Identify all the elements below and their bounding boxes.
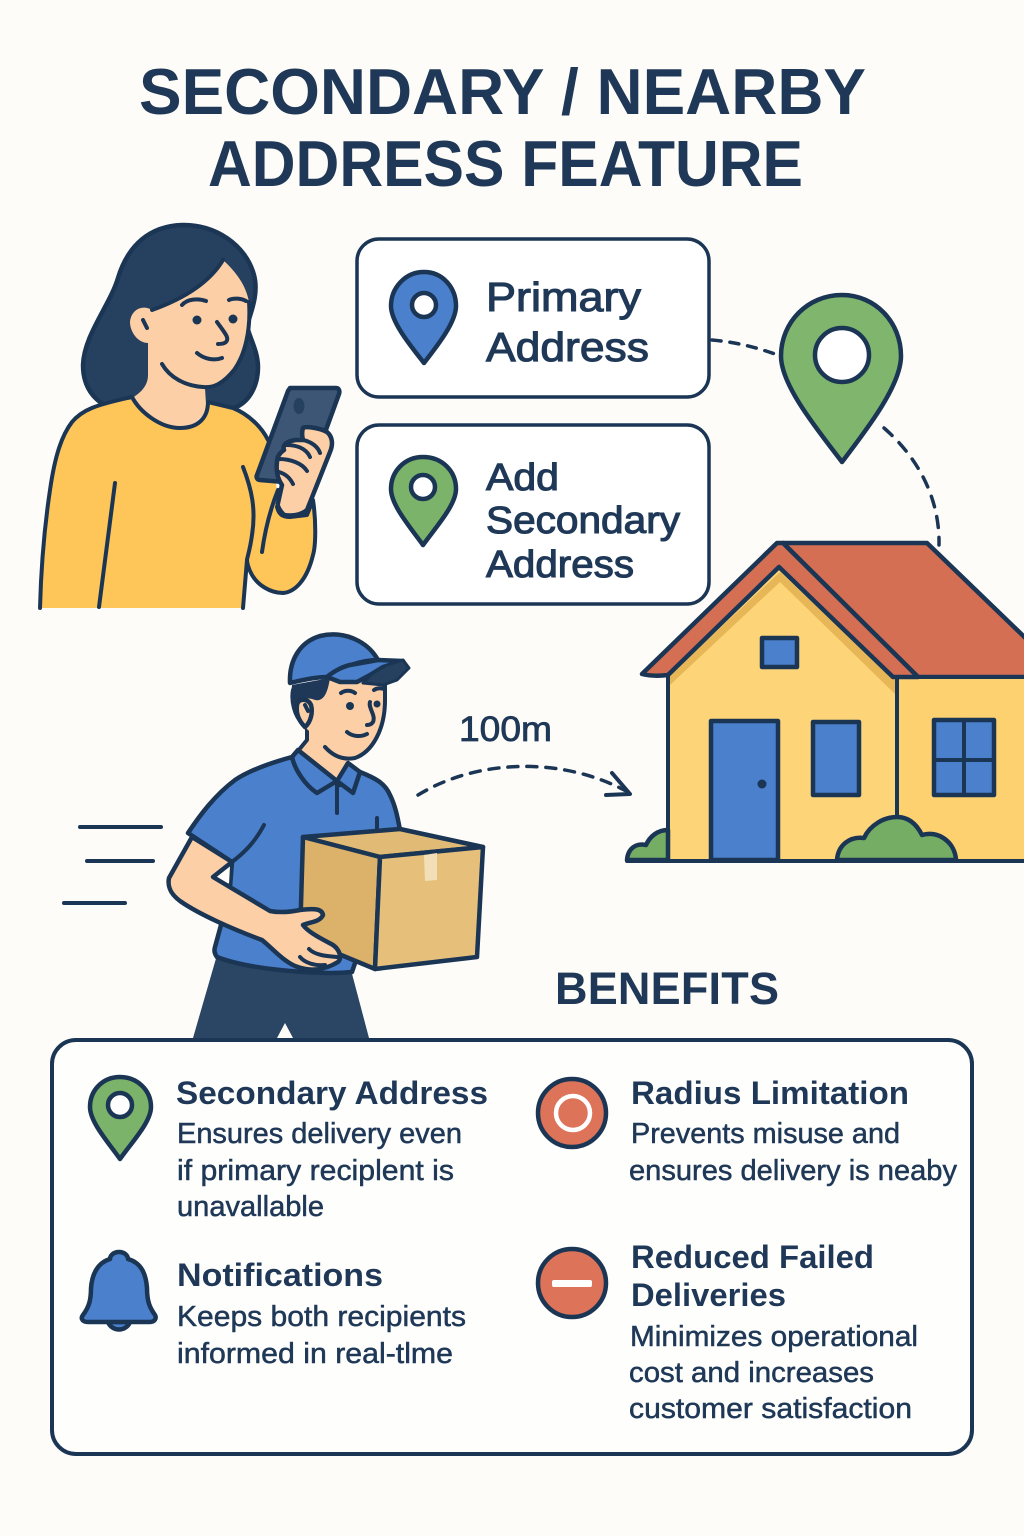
finger lines [300, 949, 337, 965]
card: add secondary address [357, 425, 709, 604]
icon: green pin [90, 1077, 151, 1159]
face details [143, 260, 249, 387]
hand [277, 427, 332, 515]
cap dome [290, 634, 378, 683]
window [813, 722, 859, 795]
icon: red circle with ring [538, 1079, 606, 1147]
fingers [279, 440, 320, 484]
ear and face details [297, 688, 384, 736]
phone [257, 388, 339, 482]
armpit gap [222, 866, 230, 884]
hair [83, 225, 258, 408]
benefit: reduced failed deliveries: Reduced Failed [631, 1239, 874, 1275]
jaw line [292, 684, 385, 759]
speed lines [64, 827, 161, 903]
side window [934, 720, 994, 795]
benefit: secondary address: unavallable [177, 1191, 324, 1223]
dashed arrow: courier to house [418, 766, 630, 795]
benefit: reduced failed deliveries: Minimizes operational [630, 1321, 918, 1353]
main roof [783, 543, 1024, 677]
benefit: reduced failed deliveries: cost and increases [629, 1357, 874, 1389]
card: add secondary address: Add [486, 457, 559, 499]
benefit: notifications: Keeps both recipients [177, 1301, 466, 1333]
trousers [193, 955, 369, 1038]
title: ADDRESS FEATURE [208, 127, 803, 200]
cap brim [327, 660, 409, 685]
icon: bell [82, 1252, 156, 1330]
benefit: secondary address [90, 1075, 488, 1223]
face and neck [130, 260, 249, 427]
ground [627, 859, 1024, 863]
dashed arrow: card to pin [712, 340, 775, 354]
parcel [300, 829, 483, 969]
icon: blue pin [391, 272, 456, 363]
benefit: notifications: Notifications [177, 1257, 383, 1293]
sweater [40, 397, 315, 608]
attic window [762, 638, 797, 667]
icon: red circle with minus [538, 1249, 606, 1317]
illustration: house [627, 543, 1024, 861]
illustration: courier with parcel [169, 634, 483, 1038]
benefit: secondary address: Secondary Address [176, 1075, 488, 1111]
gable roof [642, 543, 918, 677]
head [293, 680, 385, 759]
benefit: reduced failed deliveries: customer satisfaction [629, 1393, 912, 1425]
benefit: radius limitation: ensures delivery is neaby [629, 1155, 958, 1187]
benefit: secondary address: Ensures delivery even [177, 1118, 462, 1150]
card: add secondary address: Secondary [486, 500, 680, 542]
benefit: notifications: informed in real-tlme [177, 1338, 453, 1370]
bushes [837, 817, 956, 860]
door [711, 721, 778, 860]
card: primary address [357, 239, 709, 397]
icon: green pin [391, 457, 456, 545]
title: SECONDARY / NEARBY [139, 55, 866, 128]
sweater folds [99, 467, 278, 607]
title [139, 55, 866, 200]
card: add secondary address: Address [486, 544, 634, 586]
card: primary address: Address [486, 324, 649, 370]
distance label: 100m [459, 710, 552, 749]
front wall [668, 567, 897, 860]
arm and hand [169, 837, 340, 969]
illustration: woman with phone [40, 225, 339, 608]
heading: benefits: BENEFITS [555, 963, 779, 1014]
shirt collar [292, 750, 360, 793]
hair [291, 678, 330, 712]
panel: benefits [52, 1040, 972, 1454]
benefit: radius limitation: Radius Limitation [631, 1075, 909, 1111]
benefit: radius limitation [538, 1075, 958, 1187]
shirt [188, 757, 400, 973]
benefit: radius limitation: Prevents misuse and [631, 1118, 900, 1150]
icon: large green pin [781, 295, 901, 462]
benefit: secondary address: if primary reciplent is [177, 1155, 454, 1187]
side wall [897, 678, 1024, 860]
neck [298, 722, 356, 782]
eave shadow [670, 572, 895, 694]
sleeve edge [188, 833, 232, 862]
card: primary address: Primary [486, 274, 642, 320]
dashed arrow: pin to house [884, 428, 939, 545]
benefit: reduced failed deliveries [538, 1239, 918, 1425]
benefit: notifications [82, 1252, 466, 1370]
sweater outline [40, 397, 315, 608]
benefit: reduced failed deliveries: Deliveries [631, 1277, 786, 1313]
